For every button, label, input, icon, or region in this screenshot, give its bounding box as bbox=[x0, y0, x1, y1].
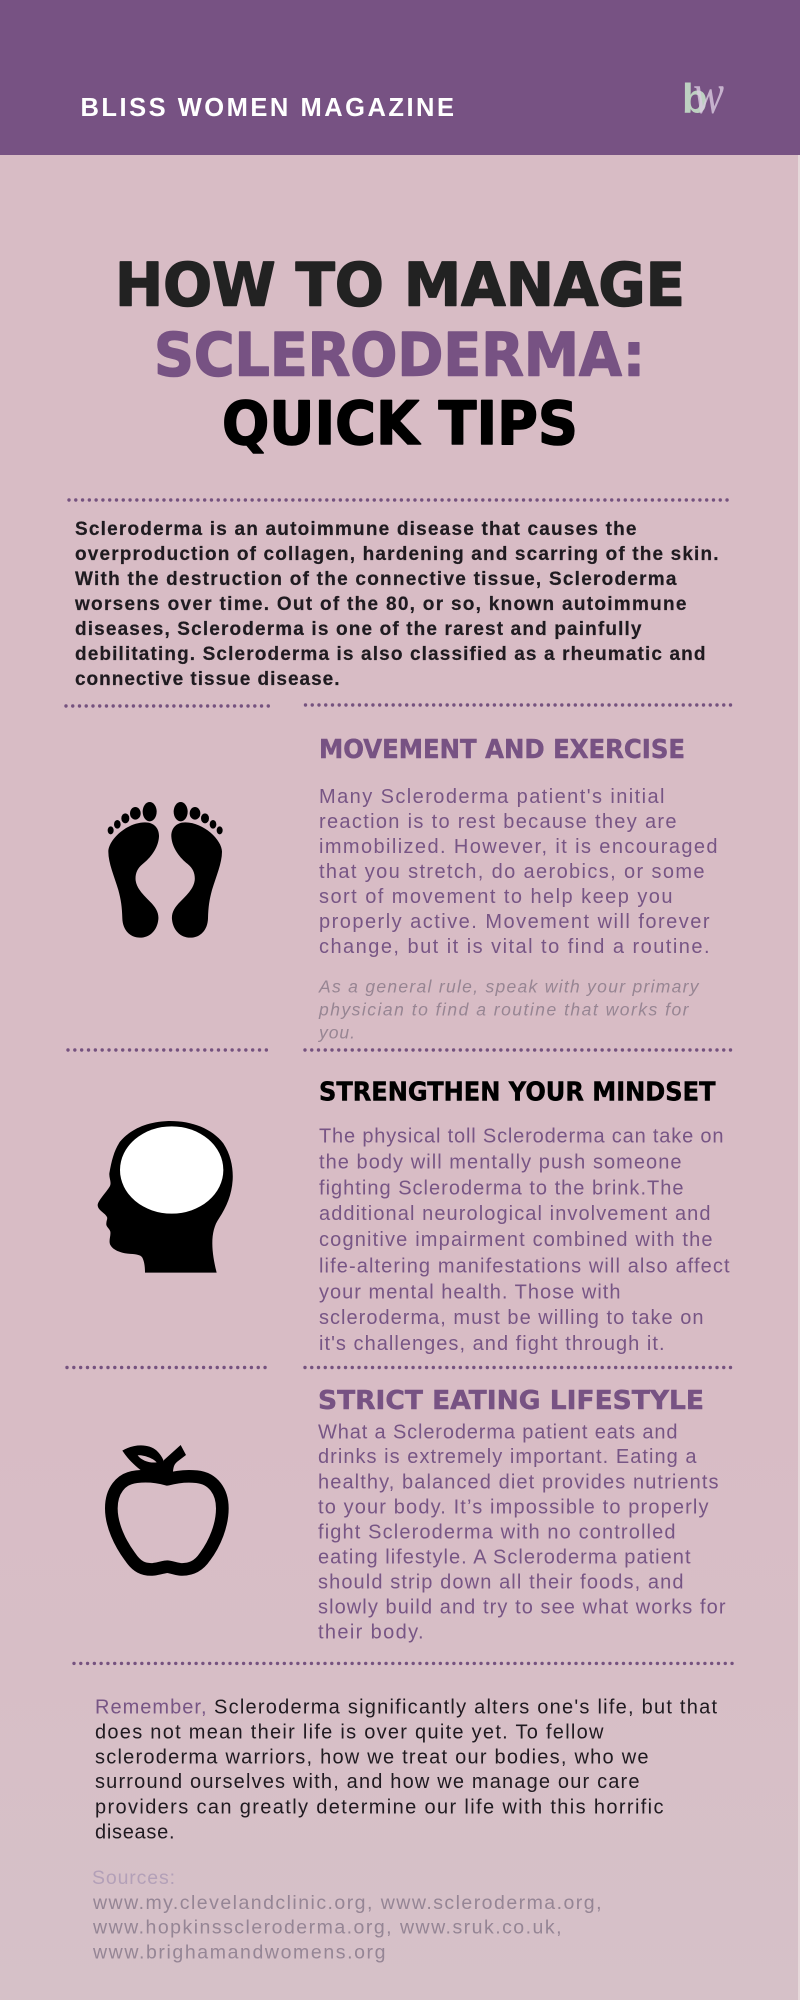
heading: strengthen your mindset: STRENGTHEN YOUR MINDSET bbox=[319, 1078, 716, 1108]
closing paragraph: Remember, bbox=[95, 1697, 206, 1719]
body text: mindset: fighting Scleroderma to the brink.The bbox=[319, 1177, 684, 1199]
body text: movement: that you stretch, do aerobics, or some bbox=[319, 861, 704, 883]
body text: mindset: the body will mentally push someone bbox=[319, 1151, 682, 1173]
intro paragraph: debilitating. Scleroderma is also classified as a rheumatic and bbox=[75, 644, 706, 665]
body text: eating: What a Scleroderma patient eats and bbox=[318, 1421, 678, 1443]
sources: www.brighamandwomens.org bbox=[92, 1942, 386, 1964]
body text: movement: sort of movement to help keep you bbox=[319, 886, 672, 908]
body text: eating: should strip down all their foods, and bbox=[318, 1571, 684, 1593]
intro paragraph: connective tissue disease. bbox=[75, 669, 340, 690]
body text: mindset: The physical toll Scleroderma can take on bbox=[319, 1126, 724, 1148]
body text: mindset: it's challenges, and fight through it. bbox=[319, 1333, 664, 1355]
icon: head silhouette bbox=[98, 1121, 233, 1273]
body text: eating: healthy, balanced diet provides nutrients bbox=[318, 1472, 718, 1494]
icon: bw logo bbox=[682, 61, 724, 126]
intro paragraph bbox=[74, 519, 718, 690]
body text: mindset: your mental health. Those with bbox=[319, 1281, 620, 1303]
panel: strengthen your mindset bbox=[98, 1078, 730, 1355]
body text: movement: change, but it is vital to find a routine. bbox=[319, 936, 710, 958]
heading: strict eating lifestyle: STRICT EATING LIFESTYLE bbox=[318, 1386, 704, 1416]
body text: movement: Many Scleroderma patient's initial bbox=[319, 786, 664, 808]
closing paragraph: does not mean their life is over quite yet. To fellow bbox=[95, 1722, 604, 1744]
closing paragraph: Scleroderma significantly alters one's life, but that bbox=[214, 1697, 717, 1719]
sources: www.my.clevelandclinic.org, www.scleroderma.org, bbox=[92, 1892, 602, 1914]
intro paragraph: overproduction of collagen, hardening and scarring of the skin. bbox=[75, 544, 718, 565]
body text: eating: their body. bbox=[318, 1622, 424, 1644]
icon: footprints bbox=[108, 802, 223, 938]
body text: movement: immobilized. However, it is encouraged bbox=[319, 836, 718, 858]
closing paragraph: providers can greatly determine our life with this horrific bbox=[95, 1796, 664, 1818]
italic note: physician to find a routine that works for bbox=[318, 999, 690, 1019]
heading: movement and exercise: MOVEMENT AND EXERCISE bbox=[319, 735, 685, 765]
header band bbox=[0, 0, 800, 155]
body text: eating: drinks is extremely important. Eating a bbox=[318, 1446, 697, 1468]
title: SCLERODERMA: bbox=[154, 321, 645, 391]
body text: eating: fight Scleroderma with no controlled bbox=[318, 1522, 676, 1544]
body text: movement: properly active. Movement will forever bbox=[319, 911, 710, 933]
intro paragraph: Scleroderma is an autoimmune disease that causes the bbox=[75, 519, 636, 540]
icon: bw logo: w bbox=[693, 61, 724, 126]
intro paragraph: With the destruction of the connective tissue, Scleroderma bbox=[75, 569, 677, 590]
panel: movement and exercise bbox=[108, 735, 717, 1042]
body text: eating: to your body. It’s impossible to properly bbox=[318, 1496, 708, 1518]
title bbox=[115, 251, 685, 459]
body text: eating bbox=[318, 1421, 726, 1644]
sources: www.hopkinsscleroderma.org, www.sruk.co.uk, bbox=[92, 1917, 562, 1939]
magazine name: BLISS WOMEN MAGAZINE bbox=[80, 94, 454, 122]
body text: mindset bbox=[319, 1126, 730, 1355]
body text: eating: slowly build and try to see what works for bbox=[318, 1596, 726, 1618]
body text: mindset: scleroderma, must be willing to take on bbox=[319, 1307, 704, 1329]
icon: apple bbox=[111, 1445, 222, 1569]
body text: movement bbox=[319, 786, 718, 958]
closing paragraph: disease. bbox=[95, 1821, 174, 1843]
italic note: As a general rule, speak with your primary bbox=[318, 976, 700, 996]
title: QUICK TIPS bbox=[222, 389, 578, 459]
italic note bbox=[318, 976, 700, 1042]
body text: mindset: additional neurological involvement and bbox=[319, 1203, 710, 1225]
closing paragraph: surround ourselves with, and how we manage our care bbox=[95, 1771, 640, 1793]
sources: Sources: bbox=[92, 1867, 175, 1889]
closing paragraph: scleroderma warriors, how we treat our bodies, who we bbox=[95, 1746, 648, 1768]
panel: strict eating lifestyle bbox=[111, 1386, 726, 1644]
body text: mindset: cognitive impairment combined with the bbox=[319, 1229, 712, 1251]
italic note: you. bbox=[318, 1022, 355, 1042]
title: HOW TO MANAGE bbox=[115, 251, 685, 321]
intro paragraph: diseases, Scleroderma is one of the rarest and painfully bbox=[75, 619, 642, 640]
icon: bw logo: b bbox=[682, 75, 708, 122]
sources bbox=[92, 1867, 602, 1964]
body text: movement: reaction is to rest because they are bbox=[319, 811, 676, 833]
body text: mindset: life-altering manifestations will also affect bbox=[319, 1255, 730, 1277]
closing paragraph bbox=[95, 1697, 717, 1843]
intro paragraph: worsens over time. Out of the 80, or so, known autoimmune bbox=[74, 594, 686, 615]
body text: eating: eating lifestyle. A Scleroderma patient bbox=[318, 1546, 691, 1568]
